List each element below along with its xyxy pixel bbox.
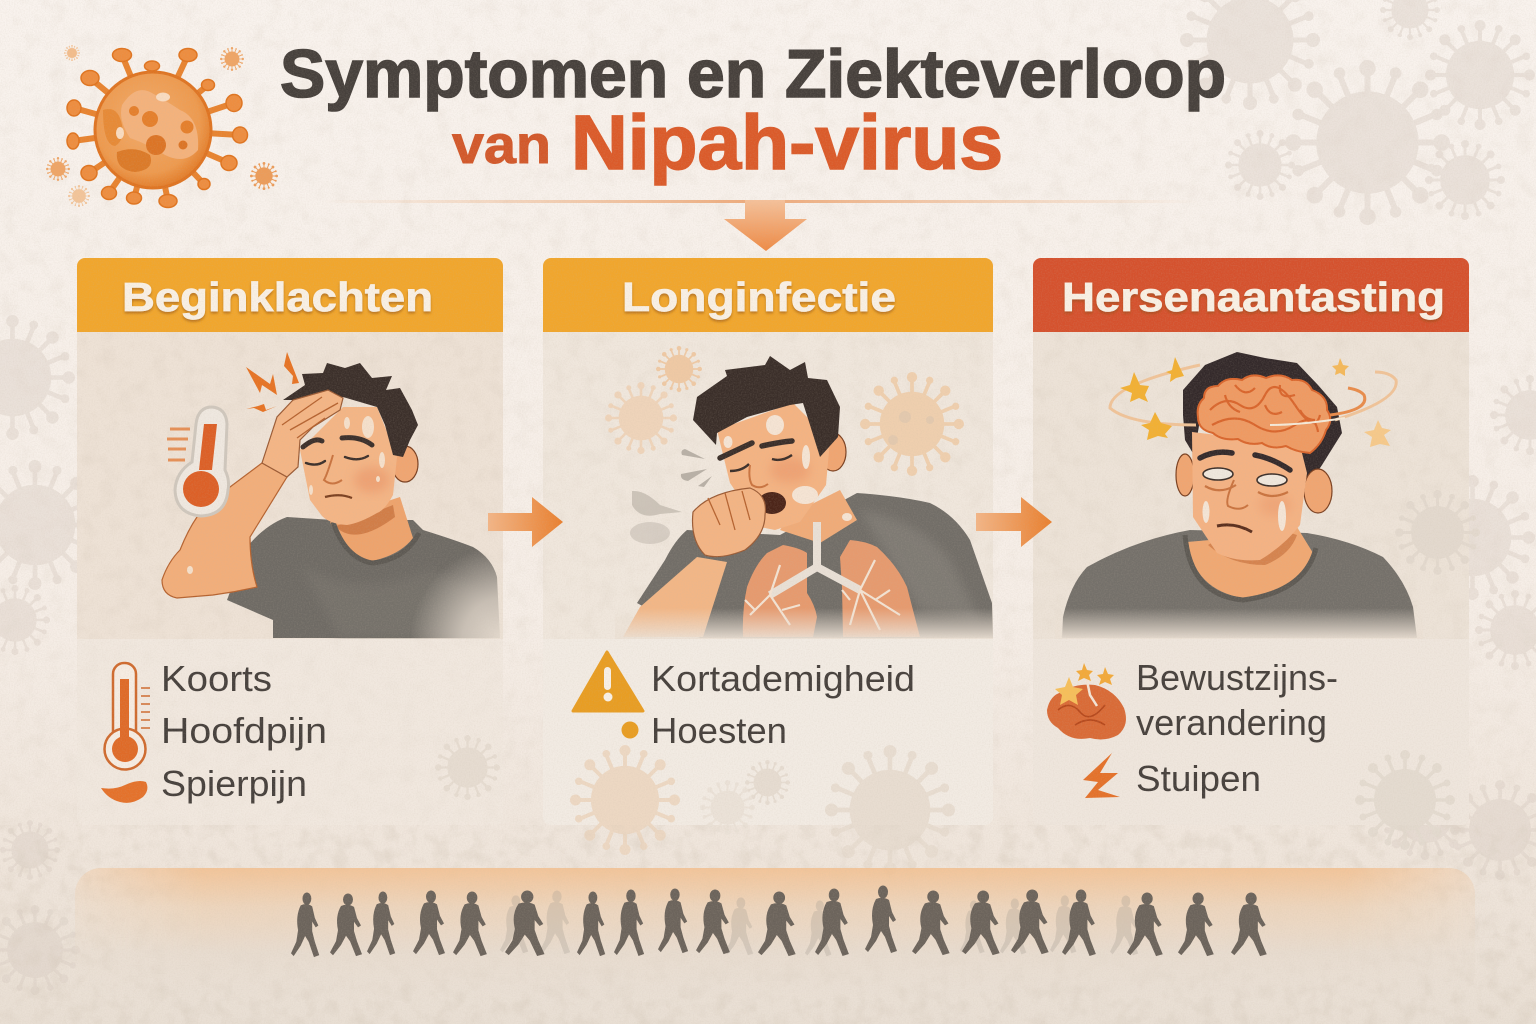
icon: warning triangle <box>573 652 643 711</box>
heading: Hersenaantasting <box>1062 274 1445 320</box>
icon: muscle <box>101 781 147 803</box>
sweat drops <box>724 415 852 521</box>
hair <box>693 356 840 457</box>
neck <box>330 497 413 561</box>
arrow: to hersenaantasting <box>976 497 1052 547</box>
symptom list <box>1047 657 1338 799</box>
bottom band <box>75 868 1475 998</box>
arm <box>623 557 727 637</box>
ear <box>392 446 418 482</box>
virus illustrations <box>605 346 964 476</box>
divider line <box>320 200 1200 203</box>
mouth <box>758 492 786 514</box>
walking crowd silhouettes <box>291 886 1267 957</box>
fist <box>692 488 765 557</box>
label: Hoesten: Hoesten <box>651 710 787 751</box>
neck <box>1187 527 1313 598</box>
face <box>1192 432 1307 560</box>
symptom list <box>101 658 327 804</box>
face <box>717 403 830 530</box>
hair <box>283 363 418 457</box>
title <box>280 36 1226 186</box>
arm <box>162 463 287 598</box>
pain bolts <box>246 367 277 395</box>
arrow: to longinfectie <box>488 497 563 547</box>
bullet <box>622 722 638 738</box>
icon: lightning <box>1083 753 1120 798</box>
panel: Hersenaantasting <box>1033 258 1480 850</box>
cough droplets <box>630 449 712 544</box>
brows and eyes <box>720 441 792 458</box>
symptom list <box>573 652 915 751</box>
bottom fade of figure <box>615 608 993 639</box>
virus watermarks in panel <box>570 745 955 875</box>
lungs <box>743 522 920 637</box>
ear <box>820 433 846 471</box>
label: Hoofdpijn: Hoofdpijn <box>161 710 327 751</box>
title word: Nipah-virus: Nipah-virus <box>571 100 1003 186</box>
brows and eyes <box>1200 452 1290 470</box>
virus watermark in panel <box>435 735 500 800</box>
illustration: dizzy man with brain <box>1055 352 1423 639</box>
shirt <box>637 493 993 638</box>
brain <box>1198 375 1330 453</box>
collar <box>333 522 419 563</box>
shirt <box>1062 530 1417 638</box>
mottled strip below panels <box>0 825 1536 1024</box>
neck <box>780 490 857 543</box>
orbit and stars <box>1110 357 1396 447</box>
shirt <box>227 517 500 638</box>
label: Kortademigheid: Kortademigheid <box>651 658 915 699</box>
ears <box>1176 454 1332 513</box>
header bar <box>77 258 503 332</box>
label: Bewustzijns-: Bewustzijns- <box>1136 657 1338 698</box>
icon: brain with stars <box>1047 663 1126 739</box>
title word: van: van <box>452 115 551 175</box>
panel: Longinfectie <box>543 258 993 875</box>
label: Spierpijn: Spierpijn <box>161 763 307 804</box>
title line 1: Symptomen en Ziekteverloop <box>280 36 1226 112</box>
label: Stuipen: Stuipen <box>1136 758 1261 799</box>
illustration: coughing man <box>615 356 993 639</box>
arrow: down from title <box>724 200 807 251</box>
sweat drops <box>1202 501 1286 531</box>
label: verandering: verandering <box>1136 702 1327 743</box>
virus illustration <box>46 45 278 208</box>
panel: Beginklachten <box>77 258 505 825</box>
sweat drops <box>187 416 385 574</box>
icon: thermometer <box>104 663 150 770</box>
header bar <box>543 258 993 332</box>
face <box>300 407 397 525</box>
illustration: man holding forehead <box>162 352 505 640</box>
label: Koorts: Koorts <box>161 658 272 699</box>
heading: Longinfectie <box>622 274 896 320</box>
header bar <box>1033 258 1469 332</box>
hair <box>1183 352 1342 490</box>
eyebrows and eyes <box>303 438 372 447</box>
faint crowd <box>500 890 1138 956</box>
heading: Beginklachten <box>122 274 433 320</box>
thermometer <box>175 407 229 516</box>
hand <box>262 390 343 477</box>
virus watermarks in panel <box>1355 490 1480 850</box>
